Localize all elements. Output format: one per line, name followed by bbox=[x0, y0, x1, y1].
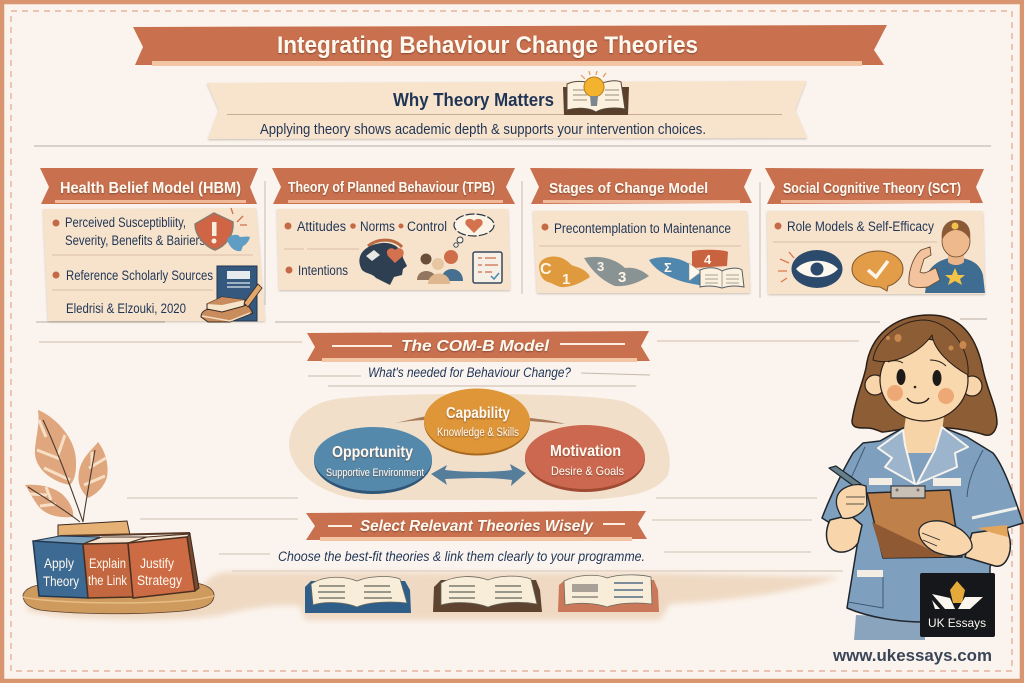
panel: stages of change bbox=[530, 168, 752, 293]
panel: theory of planned behaviour bbox=[272, 168, 515, 290]
icon: stage shapes: 4 bbox=[704, 252, 712, 267]
icon: warning shield bbox=[195, 208, 250, 251]
node: capability bbox=[424, 388, 530, 456]
nurse collar bbox=[878, 427, 968, 484]
shape: tray bbox=[23, 583, 214, 614]
box: justify strategy: Justify bbox=[140, 555, 174, 571]
icon: stage shapes bbox=[539, 250, 744, 288]
header: HBM bbox=[40, 168, 258, 204]
box: justify strategy: Strategy bbox=[137, 572, 182, 588]
box: explain the link bbox=[83, 537, 147, 598]
icon: stage shapes: 3 bbox=[618, 269, 626, 286]
node: motivation bbox=[525, 425, 645, 492]
banner: COM-B bbox=[307, 331, 650, 362]
box: apply theory: Theory bbox=[43, 573, 79, 589]
nurse pants bbox=[854, 615, 925, 640]
body: SCT: Role Models & Self-Efficacy bbox=[787, 219, 934, 234]
icon: thought bubble with heart bbox=[454, 214, 494, 247]
logo: UK Essays: UK Essays bbox=[928, 616, 986, 630]
nurse left arm bbox=[826, 515, 862, 552]
website url: www.ukessays.com bbox=[832, 646, 992, 665]
sub-heading: COM-B: What's needed for Behaviour Change? bbox=[368, 365, 571, 380]
icon: check speech bubble bbox=[852, 251, 903, 291]
shape: pot bbox=[58, 521, 130, 536]
icon: plant bbox=[25, 410, 108, 522]
body: TPB bbox=[277, 209, 510, 290]
illustration: plant and theory boxes bbox=[23, 410, 214, 614]
nurse sleeve details bbox=[972, 508, 1017, 518]
body: HBM bbox=[43, 208, 265, 321]
why theory matters banner bbox=[207, 71, 807, 139]
box: explain the link: the Link bbox=[88, 573, 127, 588]
box: apply theory bbox=[33, 533, 190, 598]
header: TPB bbox=[272, 168, 515, 204]
background oval bbox=[289, 394, 670, 500]
title banner bbox=[133, 25, 887, 66]
ground wash bbox=[26, 572, 840, 620]
title banner: Integrating Behaviour Change Theories bbox=[277, 32, 698, 59]
body: TPB: Norms bbox=[360, 219, 395, 234]
body: HBM: Perceived Susceptibliity, bbox=[65, 215, 186, 230]
panel: health belief model bbox=[40, 168, 265, 322]
banner: select: Select Relevant Theories Wisely bbox=[360, 518, 594, 535]
icon: people group bbox=[417, 250, 463, 284]
icon: stage shapes: 3 bbox=[597, 259, 604, 274]
box: explain the link: Explain bbox=[89, 556, 126, 571]
arrow: two-way bbox=[431, 464, 526, 486]
nurse neck bbox=[903, 416, 944, 453]
body: stages: Precontemplation to Maintenance bbox=[554, 221, 731, 236]
nurse hair back bbox=[852, 315, 997, 435]
node: motivation: Motivation bbox=[550, 443, 621, 460]
illustration: nurse with clipboard bbox=[822, 315, 1023, 640]
node: capability: Capability bbox=[446, 405, 510, 422]
body: HBM: Eledrisi & Elzouki, 2020 bbox=[66, 301, 186, 316]
body: HBM: Reference Scholarly Sources bbox=[66, 268, 213, 283]
nurse face bbox=[865, 320, 982, 421]
icon: role model person bbox=[909, 220, 985, 293]
header: TPB: Theory of Planned Behaviour (TPB) bbox=[288, 179, 495, 196]
icon: book with light bulb bbox=[563, 71, 629, 115]
pen bbox=[829, 466, 861, 487]
nurse right arm bbox=[965, 528, 1010, 566]
node: opportunity: Supportive Environment bbox=[326, 467, 424, 479]
nurse uniform bbox=[822, 427, 1023, 622]
node: opportunity bbox=[314, 427, 432, 494]
body: TPB: Intentions bbox=[298, 263, 348, 278]
nurse hands bbox=[836, 485, 972, 556]
node: motivation: Desire & Goals bbox=[551, 464, 624, 478]
node: opportunity: Opportunity bbox=[332, 444, 413, 461]
sub text: Applying theory shows academic depth & supports your intervention choices. bbox=[260, 122, 706, 138]
icon: stage shapes: 1 bbox=[562, 271, 570, 288]
node: capability: Knowledge & Skills bbox=[437, 427, 519, 439]
divider lines bbox=[34, 146, 991, 571]
banner: select bbox=[306, 511, 647, 541]
header: stages: Stages of Change Model bbox=[549, 180, 708, 197]
icon: books and pen bbox=[201, 266, 262, 322]
body: SCT bbox=[767, 211, 985, 294]
icon: open book blue bbox=[305, 577, 411, 613]
header: stages bbox=[530, 168, 752, 204]
icon: stage shapes: Σ bbox=[664, 260, 672, 275]
body: TPB: Control bbox=[407, 219, 447, 234]
box: justify strategy bbox=[128, 534, 199, 598]
body: HBM: Severity, Benefits & Bairiers bbox=[65, 233, 205, 248]
panel: social cognitive theory bbox=[765, 168, 985, 294]
icon: open book brown bbox=[433, 576, 542, 612]
panel: COM-B model bbox=[289, 331, 670, 500]
header: SCT bbox=[765, 168, 984, 204]
heading: why theory matters: Why Theory Matters bbox=[393, 90, 554, 110]
icon: checklist bbox=[473, 252, 502, 283]
panel: select relevant theories bbox=[278, 511, 659, 613]
banner: COM-B: The COM-B Model bbox=[401, 338, 550, 355]
sub-heading: select: Choose the best-fit theories & link them clearly to your programme. bbox=[278, 549, 645, 564]
logo: UK Essays bbox=[920, 573, 995, 637]
header: HBM: Health Belief Model (HBM) bbox=[60, 180, 241, 197]
icon: open book terracotta bbox=[558, 575, 659, 612]
body: stages bbox=[533, 211, 750, 293]
icon: eye bbox=[778, 250, 842, 288]
box: apply theory: Apply bbox=[44, 555, 74, 571]
clipboard bbox=[867, 486, 962, 558]
header: SCT: Social Cognitive Theory (SCT) bbox=[783, 180, 961, 197]
icon: head with heart bbox=[359, 240, 407, 285]
icon: stage shapes: C bbox=[540, 261, 552, 278]
body: TPB: Attitudes bbox=[297, 219, 346, 234]
